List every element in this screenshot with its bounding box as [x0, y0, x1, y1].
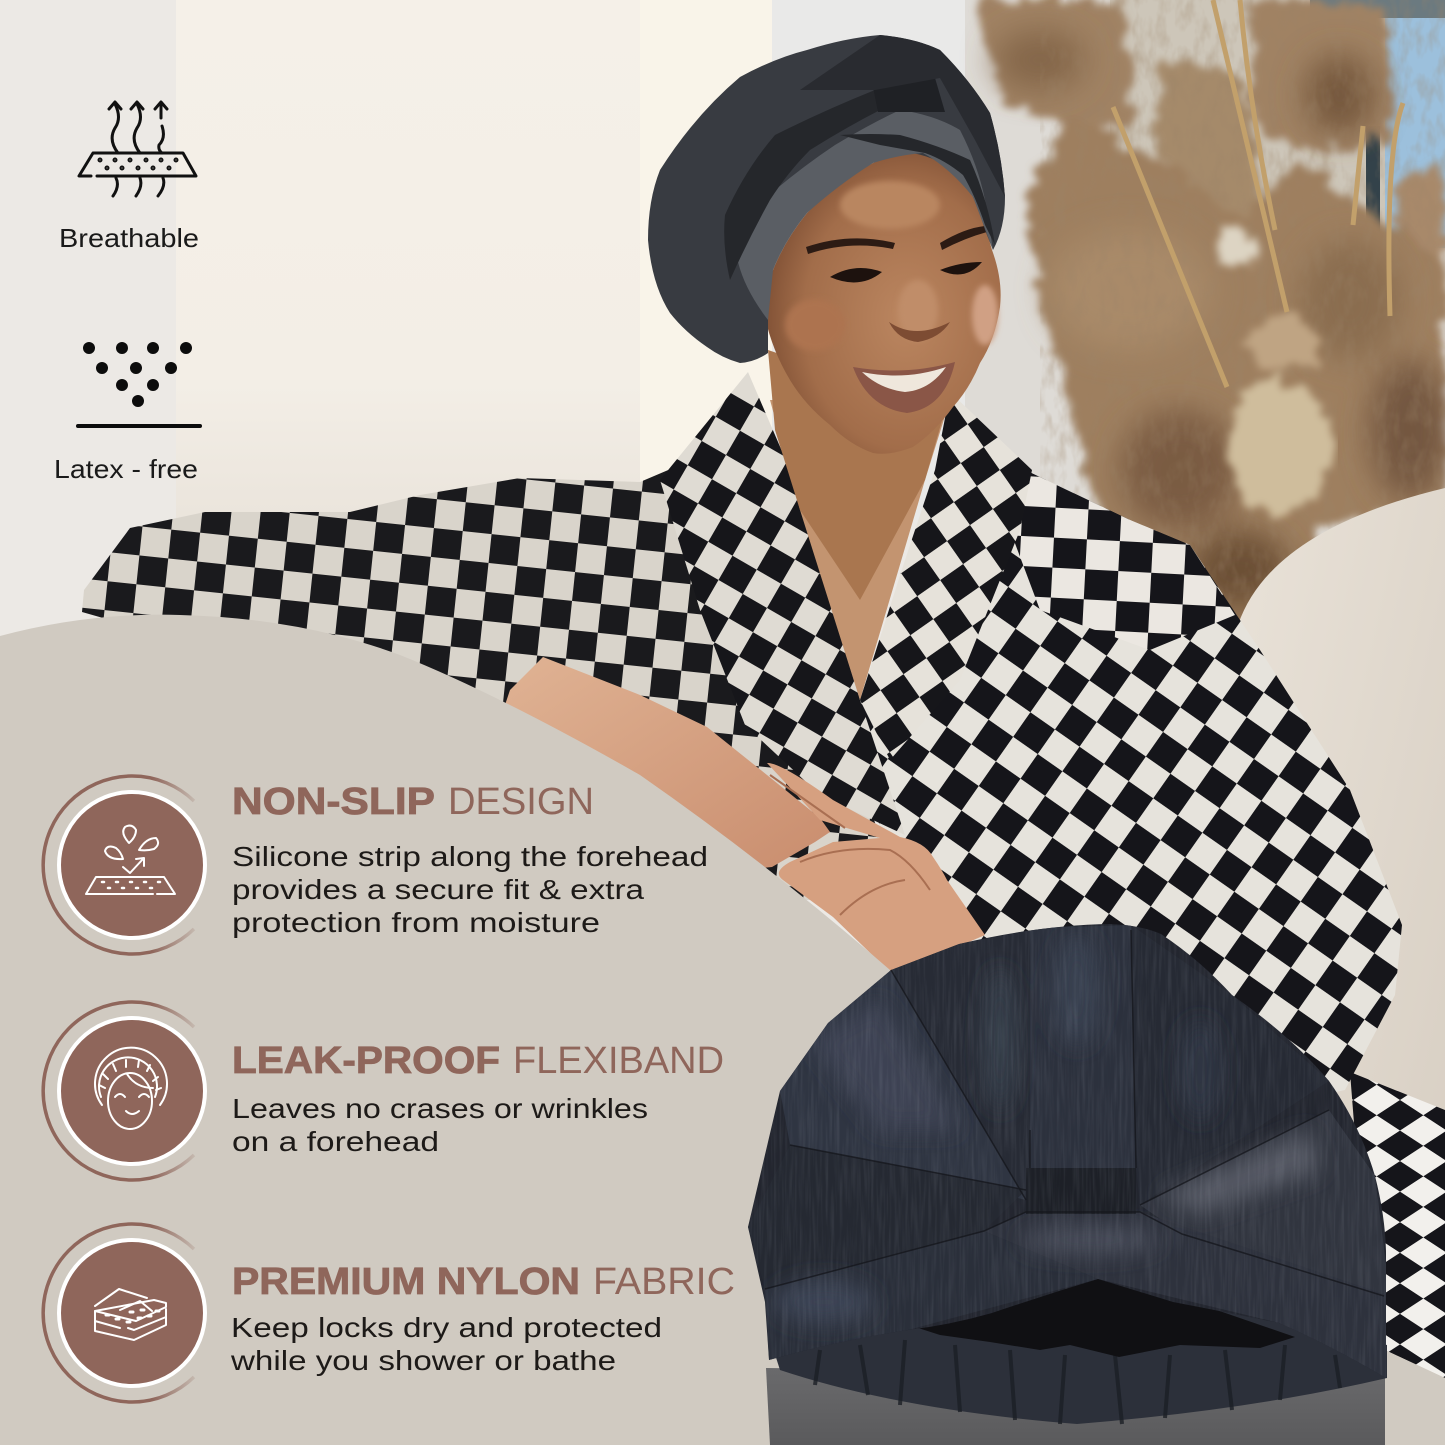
- text: leak-proof description: [232, 1093, 648, 1157]
- text: premium nylon description: [230, 1312, 662, 1376]
- cap fold lines: [765, 930, 1384, 1296]
- label: latex-free: Latex - free: [54, 454, 198, 484]
- robe: shoulder: [1010, 470, 1235, 650]
- upper hand: [767, 763, 985, 975]
- eyes: [830, 262, 982, 282]
- robe: left collar: [660, 372, 905, 835]
- centre tab: [1026, 1168, 1136, 1214]
- robe: left sleeve and torso: [82, 430, 880, 900]
- finger creases: [770, 775, 930, 915]
- grey reflection: [766, 1368, 1385, 1445]
- icon: premium nylon badge: [43, 1224, 205, 1402]
- heading: premium nylon: FABRIC: [593, 1261, 735, 1303]
- wrap: light band: [738, 110, 993, 320]
- text: non-slip description: provides a secure fit & extra: [232, 874, 645, 905]
- face: [764, 152, 1001, 454]
- heading: non-slip: [232, 781, 594, 823]
- woman: head and wrap: [648, 35, 1005, 600]
- heading: premium nylon: PREMIUM NYLON: [232, 1261, 580, 1303]
- robe: right collar: [860, 392, 1032, 760]
- ruffled elastic: [772, 1280, 1387, 1424]
- fan facets: [780, 970, 1026, 1200]
- stems: [1113, 0, 1403, 387]
- text: premium nylon description: Keep locks dry and protected: [231, 1312, 662, 1343]
- icon: non-slip badge: [43, 776, 205, 954]
- heading: non-slip: NON-SLIP: [232, 781, 435, 823]
- sofa: [1238, 488, 1445, 1440]
- text: leak-proof description: Leaves no crases or wrinkles: [232, 1093, 648, 1124]
- heading: non-slip: DESIGN: [448, 781, 594, 823]
- text: premium nylon description: while you shower or bathe: [230, 1345, 616, 1376]
- teeth: [862, 367, 946, 392]
- neck: [768, 350, 945, 600]
- text: non-slip description: protection from moisture: [232, 907, 600, 938]
- icon: breathable: [79, 102, 196, 196]
- heading: leak-proof: FLEXIBAND: [513, 1040, 724, 1082]
- cheek highlights: [785, 181, 998, 351]
- robe: lower right: [1350, 1072, 1445, 1378]
- heading: leak-proof: LEAK-PROOF: [232, 1040, 500, 1082]
- wrap: knot: [873, 78, 945, 112]
- wrap: dark band: [724, 90, 995, 280]
- pale plumes: [1215, 232, 1332, 515]
- wrap: top shadow: [800, 35, 1005, 197]
- ruffle folds: [815, 1340, 1340, 1424]
- icon: latex-free: [76, 342, 202, 428]
- satin lining: [912, 1275, 1295, 1357]
- straw texture: [1040, 0, 1445, 620]
- product cap: [745, 920, 1390, 1445]
- cap body: [748, 924, 1386, 1378]
- arm and hands: [500, 657, 985, 975]
- forearm and back fingers: [500, 657, 830, 870]
- head wrap: [648, 35, 1005, 363]
- dried pampas grass backdrop: [965, 0, 1445, 630]
- heading: leak-proof: [232, 1040, 724, 1082]
- text: non-slip description: Silicone strip along the forehead: [232, 841, 708, 872]
- eyebrows: [806, 226, 987, 254]
- label: breathable: Breathable: [59, 223, 199, 253]
- nose: [889, 322, 950, 342]
- heading: premium nylon: [232, 1261, 735, 1303]
- robe: right body and sleeve: [860, 470, 1402, 1100]
- text: non-slip description: [232, 841, 708, 938]
- beige corner under robe: [1385, 1350, 1445, 1445]
- beige panel: [0, 615, 1100, 1445]
- icon: leak-proof badge: [43, 1002, 205, 1180]
- cap facets and highlights: [745, 920, 1390, 1380]
- text: leak-proof description: on a forehead: [232, 1126, 439, 1157]
- lips: [853, 362, 955, 413]
- robe: skin of chest: [770, 400, 950, 700]
- bathrobe: [82, 372, 1445, 1378]
